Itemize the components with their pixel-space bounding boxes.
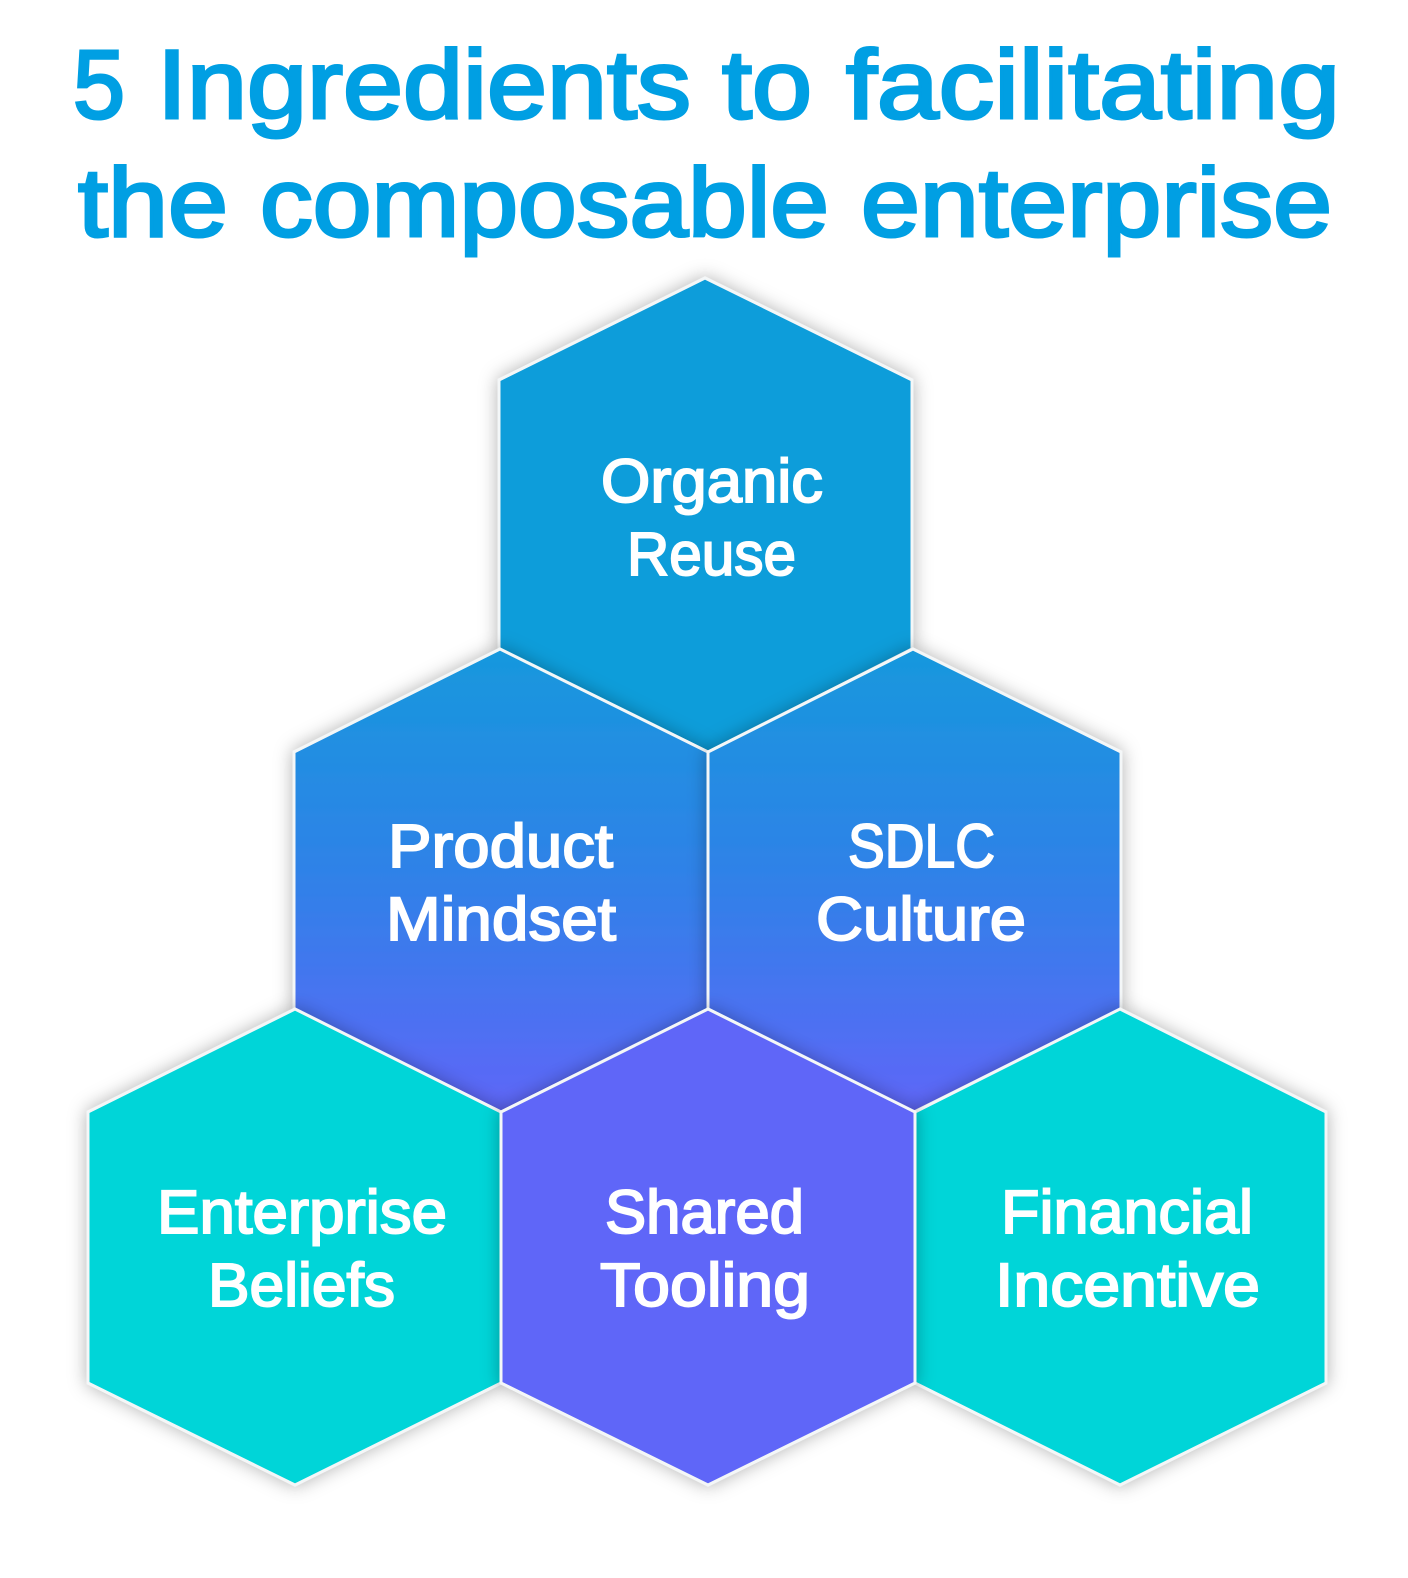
title: to xyxy=(722,30,812,139)
hexagon: Organic Reuse: Organic xyxy=(601,447,823,515)
hexagon: Product Mindset: Mindset xyxy=(386,885,616,953)
hexagon: SDLC Culture xyxy=(708,649,1121,1112)
hexagon: Financial Incentive: Incentive xyxy=(995,1251,1260,1319)
title xyxy=(73,30,1340,257)
title: the xyxy=(78,148,228,257)
hexagon: Enterprise Beliefs: Enterprise xyxy=(157,1178,447,1246)
hexagon: Product Mindset: Product xyxy=(388,812,613,880)
title: Ingredients xyxy=(157,30,691,139)
hexagon: Shared Tooling xyxy=(501,1009,915,1485)
hexagon: Enterprise Beliefs: Beliefs xyxy=(208,1251,395,1319)
hexagon: Shared Tooling: Tooling xyxy=(600,1251,810,1319)
hexagon: Organic Reuse xyxy=(499,278,912,752)
hexagon: Shared Tooling: Shared xyxy=(605,1178,804,1246)
title: facilitating xyxy=(846,30,1340,139)
hexagon: Financial Incentive: Financial xyxy=(1001,1178,1253,1246)
hexagon: SDLC Culture: SDLC xyxy=(848,812,995,880)
title: composable xyxy=(260,148,829,257)
title: enterprise xyxy=(861,148,1332,257)
hexagon: Organic Reuse: Reuse xyxy=(627,520,796,588)
hexagon: SDLC Culture: Culture xyxy=(816,885,1026,953)
hexagon: Financial Incentive xyxy=(915,1009,1326,1485)
title: 5 xyxy=(73,30,125,139)
hexagon: Product Mindset xyxy=(294,649,708,1112)
hexagon: Enterprise Beliefs xyxy=(88,1009,501,1485)
